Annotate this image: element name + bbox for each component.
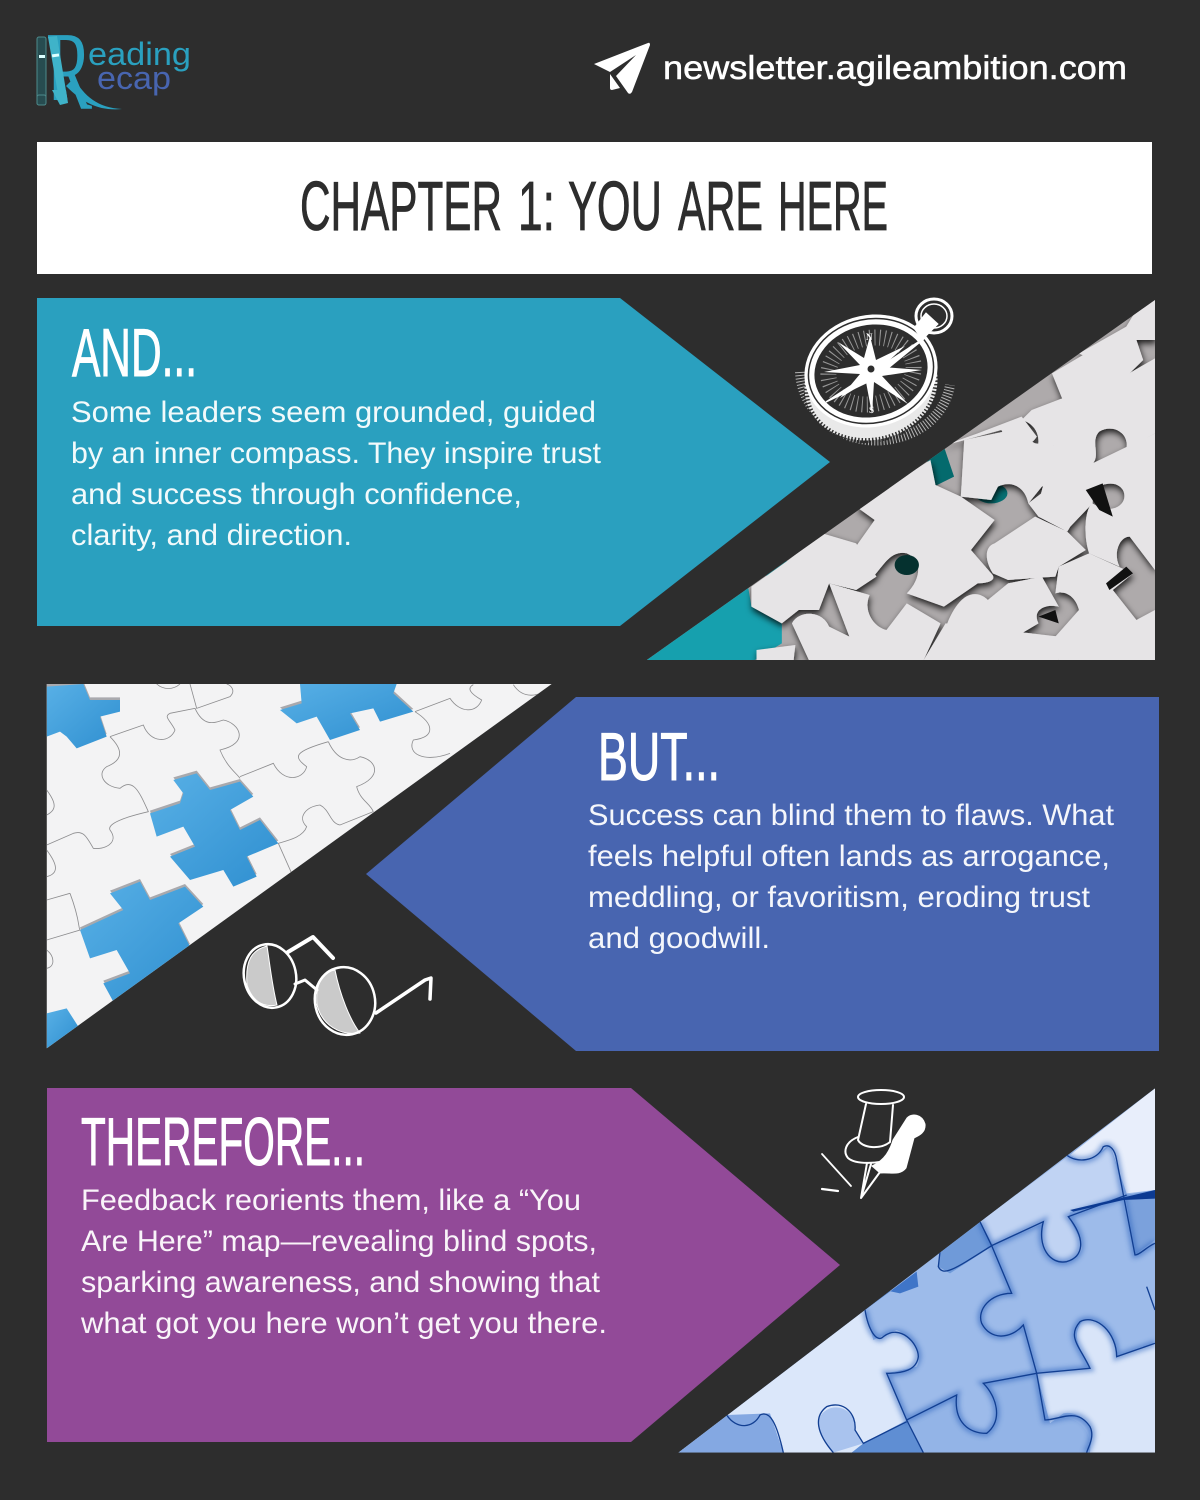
title: HERE — [778, 167, 888, 245]
body text: THEREFORE: Feedback reorients them, like a “You — [81, 1184, 581, 1217]
body text: THEREFORE: Are Here” map—revealing blind spots, — [81, 1225, 597, 1258]
logo word: eading: eading — [88, 36, 191, 72]
body text: AND: and success through confidence, — [71, 478, 522, 511]
back pieces — [1079, 300, 1155, 377]
body text: BUT: Success can blind them to flaws. What — [588, 799, 1115, 832]
website url: newsletter.agileambition.com — [663, 49, 1127, 86]
heading: BUT: BUT... — [598, 719, 720, 795]
body text: AND — [71, 396, 602, 552]
hole edge thickness — [47, 681, 413, 999]
body text: THEREFORE: sparking awareness, and showing that — [81, 1266, 601, 1299]
logo letter R: R — [46, 10, 92, 134]
title: CHAPTER — [300, 167, 502, 245]
body text: AND: Some leaders seem grounded, guided — [71, 396, 596, 429]
title — [300, 167, 888, 245]
image: white puzzle with blue gaps — [40, 680, 553, 1050]
compass letters: N — [866, 332, 873, 342]
panel: BUT — [366, 697, 1159, 1051]
compass rose — [824, 336, 922, 414]
body text: BUT: and goodwill. — [588, 922, 770, 955]
title banner — [37, 142, 1152, 274]
image: blue puzzle close-up — [670, 1080, 1157, 1453]
image: scattered white puzzle pieces — [640, 290, 1157, 662]
icon: compass — [794, 299, 952, 453]
icon: push pin — [822, 1090, 925, 1198]
heading: AND: AND... — [72, 315, 197, 391]
body text: THEREFORE: what got you here won’t get you there. — [80, 1307, 607, 1340]
body text: AND: clarity, and direction. — [71, 519, 352, 552]
seams — [47, 684, 550, 968]
title: 1: — [518, 167, 555, 245]
soft seam shading — [865, 1146, 1155, 1453]
compass needle — [826, 337, 926, 402]
dark seams — [727, 1146, 1155, 1453]
icon: glasses — [238, 937, 431, 1040]
compass ring — [914, 299, 952, 340]
panel: THEREFORE — [47, 1088, 840, 1442]
logo tail — [66, 78, 122, 109]
heading: THEREFORE: THEREFORE... — [81, 1104, 365, 1180]
body text: BUT: feels helpful often lands as arrogance, — [588, 840, 1110, 873]
icon: books — [37, 36, 74, 112]
body text: AND: by an inner compass. They inspire trust — [71, 437, 602, 470]
icon: paper plane — [594, 43, 650, 94]
icon: compass: S — [869, 405, 874, 415]
body text: BUT — [588, 799, 1115, 955]
panel: AND — [37, 298, 830, 626]
logo word: ecap: ecap — [97, 60, 171, 96]
title: YOU — [568, 167, 662, 245]
body text: BUT: meddling, or favoritism, eroding trust — [588, 881, 1091, 914]
logo: Reading Recap — [37, 10, 191, 134]
body text: THEREFORE — [80, 1184, 607, 1340]
title: ARE — [678, 167, 763, 245]
